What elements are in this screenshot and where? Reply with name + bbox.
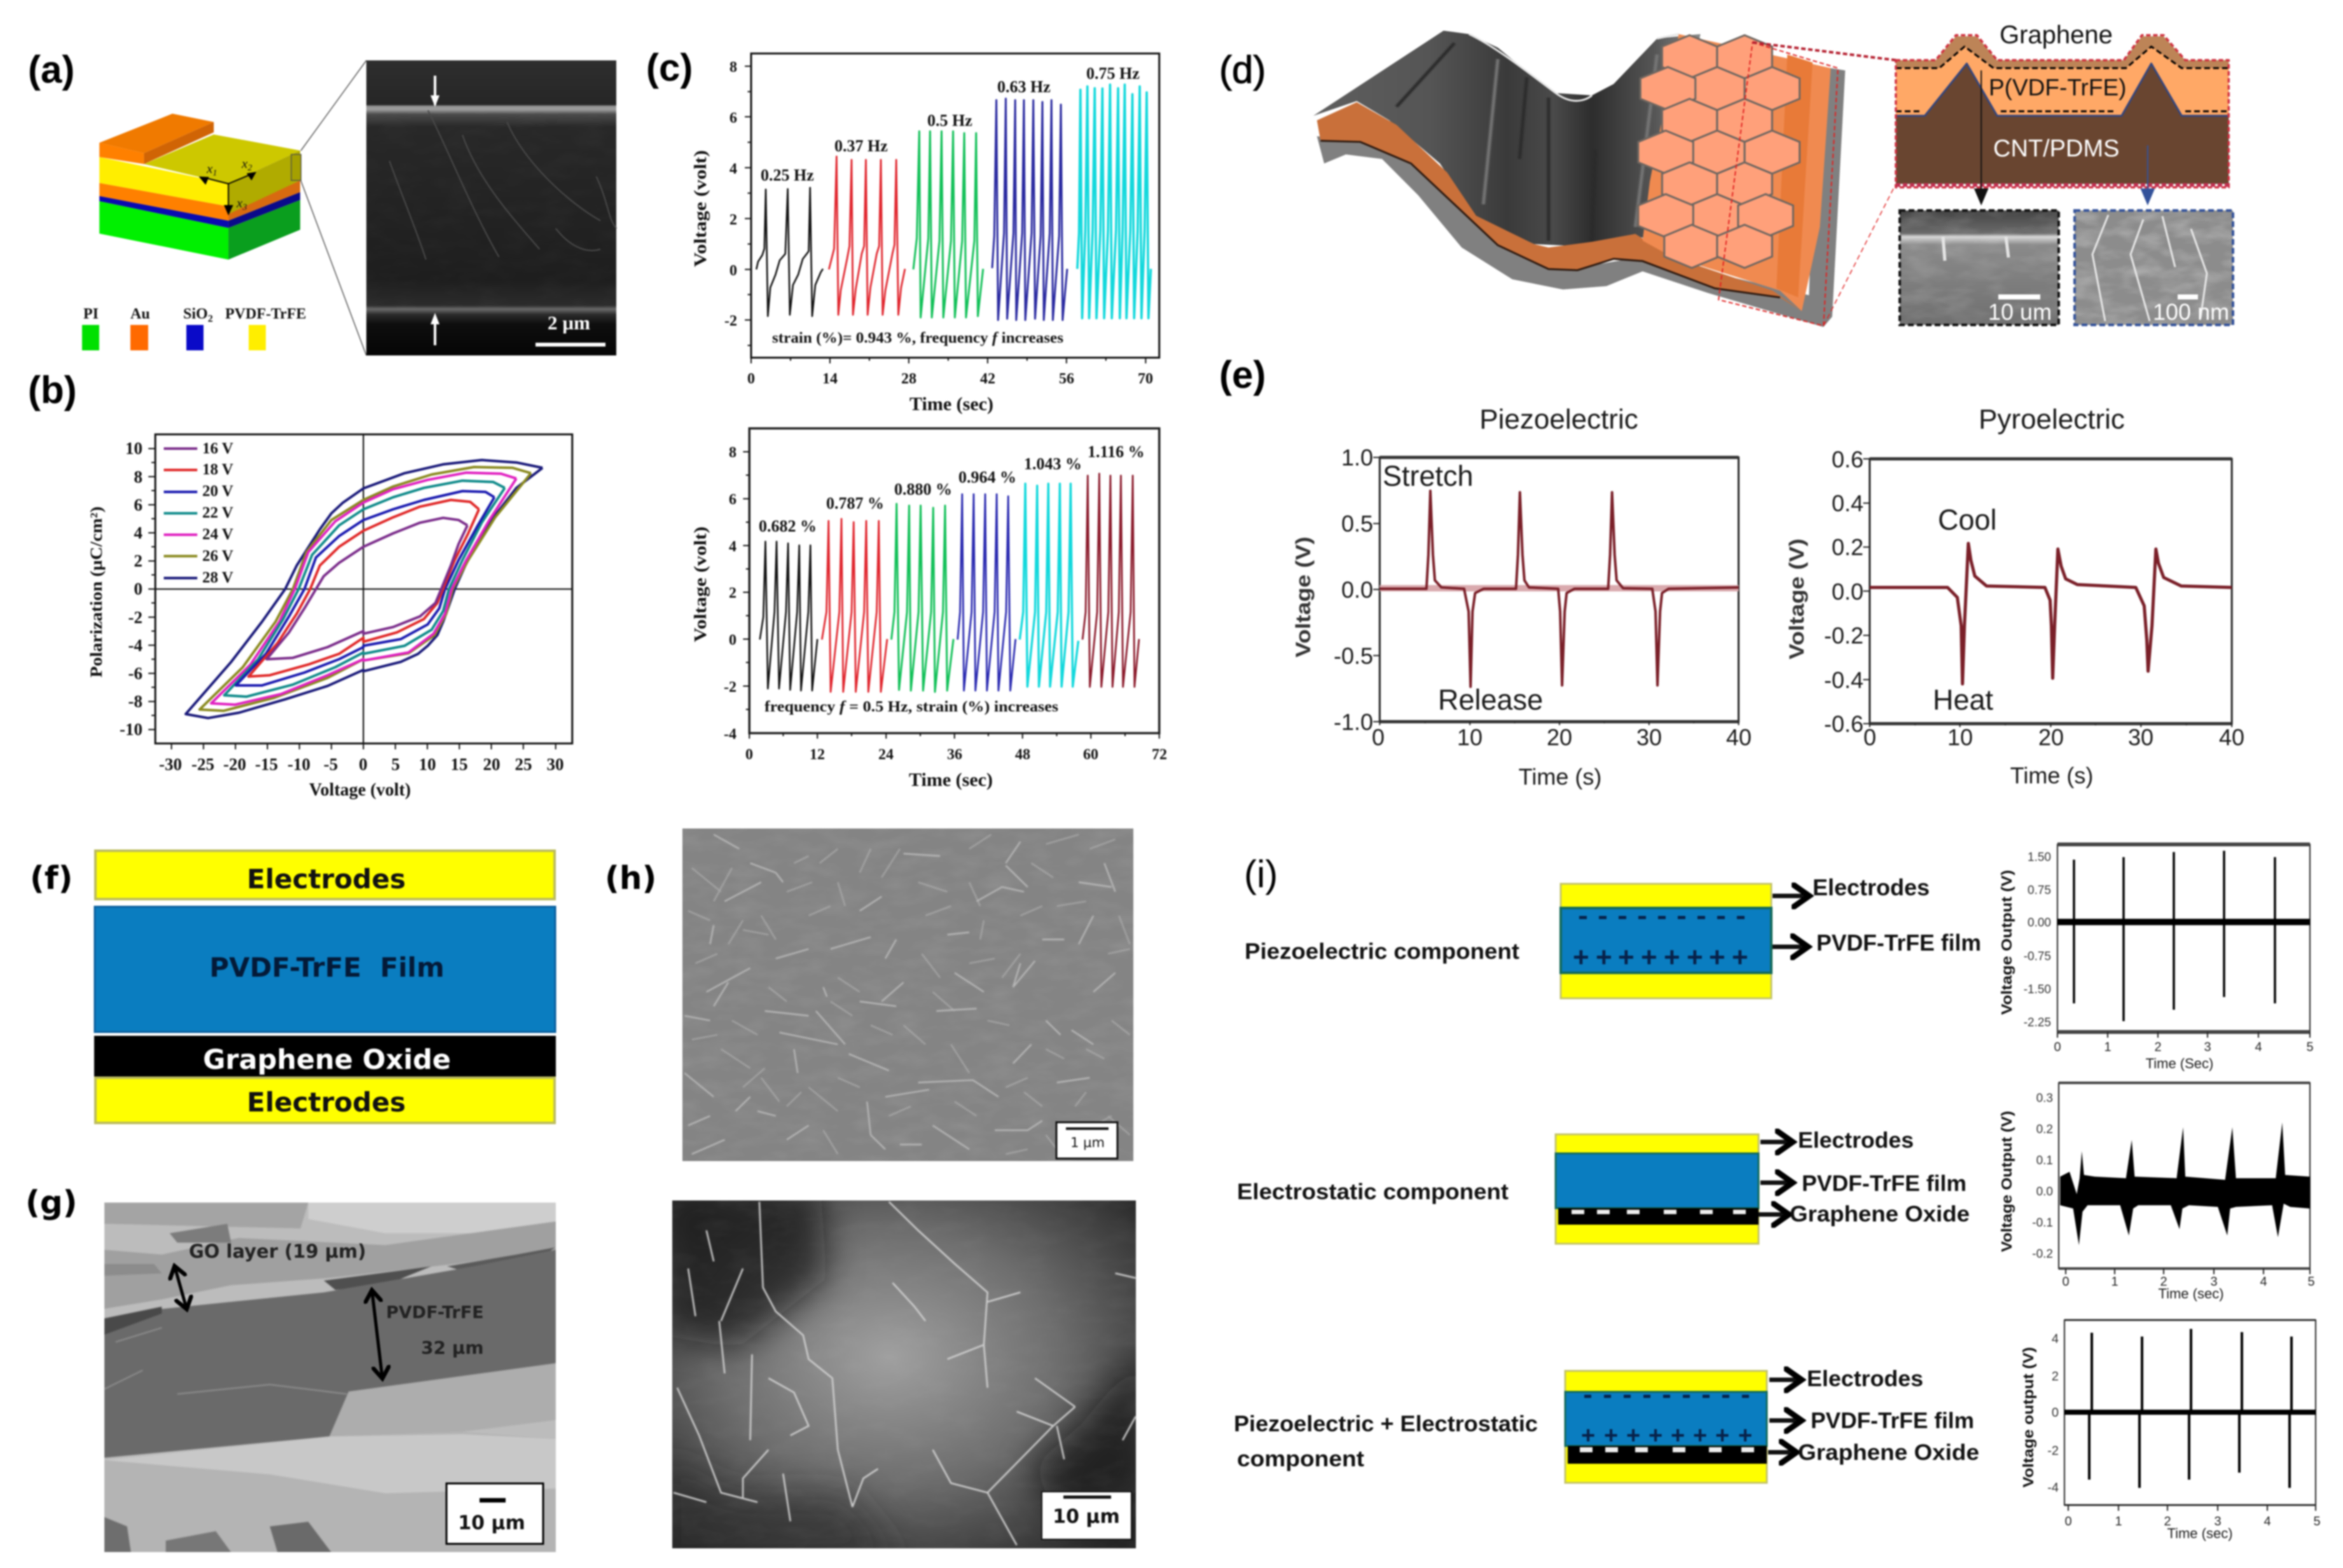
layer labels: PVDF-TrFE film xyxy=(1816,930,1981,956)
tick labels: 0 xyxy=(1372,724,1385,750)
graphene oxide layer: Graphene Oxide xyxy=(203,1044,451,1076)
output chart: Time (sec) xyxy=(2167,1525,2233,1541)
tick labels: 0.4 xyxy=(1832,490,1863,516)
output chart: 0.2 xyxy=(2036,1123,2053,1136)
output chart: -2 xyxy=(2047,1444,2059,1458)
tick labels: 1.0 xyxy=(1341,444,1373,471)
y tick labels: -4 xyxy=(724,726,736,743)
layer labels: PVDF-TrFE film xyxy=(1811,1408,1974,1433)
SEM cross-section xyxy=(366,60,616,355)
panel h: SEM images of graphene oxide xyxy=(605,829,1145,1564)
strain labels: 0.964 % xyxy=(958,468,1016,486)
legend labels: 20 V xyxy=(202,483,233,500)
y tick labels: 6 xyxy=(729,110,737,127)
cross-section labels xyxy=(1989,21,2126,162)
panel a: device schematic and SEM xyxy=(28,48,616,355)
SEM cross-section: 2 µm xyxy=(548,312,590,334)
SEM inset: 100 nm: 100 nm xyxy=(2153,299,2229,325)
y tick labels: 6 xyxy=(134,495,142,514)
hysteresis plot area xyxy=(148,434,572,750)
legend labels: 18 V xyxy=(202,461,233,478)
device stack: ++++++++ xyxy=(1573,942,1748,973)
tick labels: 40 xyxy=(2219,724,2244,750)
x tick labels: 0 xyxy=(745,746,753,763)
x tick labels: 5 xyxy=(391,755,400,774)
output chart: 1 xyxy=(2111,1275,2118,1289)
bottom electrode xyxy=(95,1078,555,1123)
panel g: SEM cross-section xyxy=(25,1184,556,1552)
frequency labels: 0.37 Hz xyxy=(834,137,888,155)
output chart: 5 xyxy=(2306,1040,2314,1054)
device stack: ++++++++ xyxy=(1581,1422,1752,1449)
plot frame and trace xyxy=(1373,457,1739,725)
axis labels xyxy=(206,156,252,212)
chart title: Pyroelectric xyxy=(1979,404,2125,435)
cross-section labels: CNT/PDMS xyxy=(1993,135,2119,162)
output chart: 3 xyxy=(2204,1040,2211,1054)
panel c top: voltage versus frequency chart xyxy=(646,46,1159,415)
panel label e: (e) xyxy=(1219,354,1266,396)
output chart: 2 xyxy=(2154,1040,2162,1054)
x tick labels: 36 xyxy=(947,746,962,763)
tick labels: 0.0 xyxy=(1341,577,1373,603)
arrows xyxy=(1768,1380,1800,1452)
legend: PI xyxy=(83,306,99,322)
panel label b: (b) xyxy=(28,369,77,411)
chart: pyroelectric xyxy=(1785,404,2244,788)
output chart: 3 xyxy=(2210,1275,2218,1289)
row title: Electrostatic component xyxy=(1237,1179,1509,1204)
legend xyxy=(82,306,307,350)
panel i: component diagrams and output charts xyxy=(1234,844,2321,1541)
panel b: polarization hysteresis chart xyxy=(28,369,572,800)
output chart xyxy=(2020,1320,2321,1541)
y tick labels: -2 xyxy=(724,679,736,696)
layer labels xyxy=(1798,1366,1979,1465)
output chart: Voltage output (V) xyxy=(2020,1347,2036,1488)
graphene oxide layer xyxy=(94,1036,556,1076)
y tick labels: 8 xyxy=(134,467,142,486)
x tick labels: 15 xyxy=(450,755,468,774)
device stack xyxy=(1561,884,1771,998)
output chart: 1 xyxy=(2115,1515,2122,1529)
axis labels: x xyxy=(207,161,212,176)
x tick labels: 30 xyxy=(547,755,563,774)
output chart xyxy=(1998,844,2314,1071)
x tick labels: -20 xyxy=(223,755,246,774)
x tick labels: 60 xyxy=(1083,746,1098,763)
layer labels: Electrodes xyxy=(1813,874,1930,900)
SEM inset: 100 nm xyxy=(2075,210,2233,325)
y tick labels: -10 xyxy=(120,720,142,739)
panel label g: (g) xyxy=(25,1184,78,1221)
panel label i: (i) xyxy=(1244,853,1278,895)
output chart: Voltage Output (V) xyxy=(1998,1111,2015,1252)
legend: 2 xyxy=(208,313,213,324)
row title: Piezoelectric + Electrostatic xyxy=(1234,1412,1538,1436)
y axis title: Voltage (volt) xyxy=(691,150,710,267)
SEM image xyxy=(104,1202,556,1552)
annotations: Release xyxy=(1438,684,1543,716)
y tick labels: 6 xyxy=(729,492,736,508)
annotations: Cool xyxy=(1938,504,1997,536)
tick labels: 40 xyxy=(1726,724,1752,750)
top electrode xyxy=(95,851,555,899)
chart title: Piezoelectric xyxy=(1479,404,1638,435)
output chart: -0.2 xyxy=(2032,1248,2053,1261)
scale bar box: 1 µm xyxy=(1070,1135,1105,1150)
row title xyxy=(1234,1412,1538,1471)
x tick labels: 56 xyxy=(1059,371,1074,387)
x tick labels: 25 xyxy=(515,755,532,774)
layered cross-section xyxy=(1896,35,2229,205)
x tick labels xyxy=(747,371,1153,387)
x tick labels: 42 xyxy=(980,371,995,387)
strain labels xyxy=(759,443,1145,535)
arrows xyxy=(1773,896,1807,947)
output chart: 5 xyxy=(2307,1275,2315,1289)
condition note: frequency f = 0.5 Hz, strain (%) increases xyxy=(764,699,1058,715)
bottom electrode: Electrodes xyxy=(247,1087,406,1118)
y tick labels: 0 xyxy=(729,263,737,279)
top electrode: Electrodes xyxy=(247,863,406,895)
output chart: -0.1 xyxy=(2032,1216,2053,1230)
axis titles: Voltage (V) xyxy=(1785,539,1808,659)
row title: Piezoelectric component xyxy=(1245,939,1519,964)
SEM annotations: 32 µm xyxy=(421,1337,483,1358)
annotations xyxy=(1383,460,1543,716)
x axis title: Time (sec) xyxy=(909,394,993,415)
SEM annotations: GO layer (19 µm) xyxy=(189,1241,366,1262)
3D wavy film xyxy=(1313,31,1896,327)
tick labels: -0.2 xyxy=(1824,622,1863,649)
panel label h: (h) xyxy=(605,860,656,897)
output chart: 2 xyxy=(2052,1370,2059,1384)
output chart: 4 xyxy=(2260,1275,2267,1289)
axis labels: 2 xyxy=(247,163,252,173)
tick labels: 0 xyxy=(1863,724,1876,750)
row: electrostatic component xyxy=(1237,1083,2315,1302)
x tick labels xyxy=(745,746,1167,763)
strain labels: 1.043 % xyxy=(1024,455,1082,473)
strain labels: 0.880 % xyxy=(894,480,952,499)
tick labels: 10 xyxy=(1457,724,1483,750)
panel e: piezoelectric and pyroelectric charts xyxy=(1219,354,2244,790)
x tick labels: 14 xyxy=(822,371,838,387)
legend labels: 24 V xyxy=(202,526,233,543)
y axis title: Polarization (µC/cm²) xyxy=(87,506,106,678)
arrow: GO layer thickness xyxy=(175,1267,186,1308)
output chart: Voltage Output (V) xyxy=(1998,870,2015,1015)
tick labels xyxy=(1824,446,2244,750)
x tick labels: -15 xyxy=(255,755,278,774)
panel label c: (c) xyxy=(646,46,693,89)
y tick labels xyxy=(724,444,736,743)
tick labels: 0.0 xyxy=(1832,579,1863,605)
x tick labels: 28 xyxy=(901,371,916,387)
x tick labels: 0 xyxy=(359,755,368,774)
tick labels: 0.5 xyxy=(1341,511,1373,537)
annotations: Stretch xyxy=(1383,460,1474,492)
y tick labels: 8 xyxy=(729,444,736,461)
scale bar box xyxy=(446,1483,543,1544)
output chart: -2.25 xyxy=(2024,1016,2051,1029)
axis labels: x xyxy=(242,156,247,171)
axis labels: 1 xyxy=(212,168,217,178)
y tick labels: 0 xyxy=(134,579,142,598)
x axis title: Voltage (volt) xyxy=(309,780,411,800)
layered block schematic xyxy=(99,114,301,259)
output chart: -4 xyxy=(2047,1481,2059,1495)
output chart: 0.00 xyxy=(2028,916,2051,930)
axis labels: 3 xyxy=(242,203,247,212)
output chart: 0 xyxy=(2064,1515,2072,1529)
cross-section labels: P(VDF-TrFE) xyxy=(1989,74,2126,100)
output chart: 4 xyxy=(2264,1515,2271,1529)
tick labels: 0.6 xyxy=(1832,446,1863,472)
condition note: strain (%)= 0.943 %, frequency f increases xyxy=(772,330,1063,347)
tick labels: -1.0 xyxy=(1334,709,1373,735)
strain labels: 0.682 % xyxy=(759,517,817,535)
legend labels: 26 V xyxy=(202,547,233,565)
output chart: 0.75 xyxy=(2028,884,2051,897)
scale bar box: 10 µm xyxy=(1053,1506,1120,1528)
lower SEM image xyxy=(661,1189,1145,1564)
panel label a: (a) xyxy=(28,48,74,91)
SEM annotations xyxy=(189,1241,484,1358)
y tick labels: 10 xyxy=(125,439,142,458)
chart: piezoelectric xyxy=(1292,404,1752,790)
y tick labels: 2 xyxy=(729,585,736,602)
output chart: 1.50 xyxy=(2028,851,2051,864)
SEM inset: 10 um: 10 um xyxy=(1988,299,2052,325)
zoom guide lines xyxy=(301,60,366,355)
tick labels: -0.5 xyxy=(1334,643,1373,669)
output chart: -0.75 xyxy=(2024,950,2051,963)
x tick labels: 70 xyxy=(1138,371,1153,387)
arrows xyxy=(1759,1142,1791,1214)
frequency labels: 0.75 Hz xyxy=(1086,64,1140,83)
annotations: Heat xyxy=(1933,684,1994,716)
tick labels: 30 xyxy=(1636,724,1662,750)
axis titles xyxy=(1292,537,1601,790)
PVDF-TrFE film xyxy=(95,907,555,1032)
tick labels: -0.6 xyxy=(1824,711,1863,737)
tick labels: 20 xyxy=(1547,724,1572,750)
frequency labels: 0.5 Hz xyxy=(927,111,972,130)
output chart: 2 xyxy=(2164,1515,2171,1529)
frequency labels xyxy=(761,64,1140,184)
legend labels xyxy=(202,440,233,586)
legend labels: 28 V xyxy=(202,569,233,586)
y tick labels: 0 xyxy=(729,632,736,649)
scale bar box xyxy=(1056,1122,1117,1159)
y tick labels: -2 xyxy=(128,608,142,627)
upper SEM image xyxy=(682,829,1133,1161)
y tick labels xyxy=(120,439,142,739)
layer labels xyxy=(1790,1128,1970,1227)
strain labels: 1.116 % xyxy=(1088,443,1145,461)
frequency traces xyxy=(745,53,1159,363)
output chart: 0 xyxy=(2062,1275,2070,1289)
frequency labels: 0.25 Hz xyxy=(761,166,814,184)
axis titles: Time (s) xyxy=(2010,762,2093,788)
output chart: 3 xyxy=(2214,1515,2222,1529)
y tick labels: -6 xyxy=(128,664,142,683)
x tick labels: 24 xyxy=(878,746,894,763)
x tick labels: -10 xyxy=(287,755,310,774)
output chart: 4 xyxy=(2255,1040,2262,1054)
PVDF-TrFE film: PVDF-TrFE Film xyxy=(209,952,445,983)
layer labels: Electrodes xyxy=(1798,1128,1914,1153)
axis titles: Voltage (V) xyxy=(1292,537,1315,657)
row title: component xyxy=(1237,1447,1364,1471)
output chart xyxy=(1998,1083,2315,1302)
plot frame and trace xyxy=(1863,459,2232,727)
output chart: 1 xyxy=(2104,1040,2111,1054)
x tick labels: -30 xyxy=(159,755,182,774)
y axis title: Voltage (volt) xyxy=(691,526,710,642)
panel d: wavy film 3D render and cross-section xyxy=(1219,21,2233,327)
x tick labels: 10 xyxy=(418,755,436,774)
layer labels: Graphene Oxide xyxy=(1790,1202,1970,1227)
legend: PVDF-TrFE xyxy=(225,306,307,322)
output chart: 5 xyxy=(2313,1515,2321,1529)
y tick labels: 4 xyxy=(729,161,737,177)
layer labels: PVDF-TrFE film xyxy=(1802,1171,1966,1196)
panel label d: (d) xyxy=(1219,48,1266,91)
tick labels: -0.4 xyxy=(1824,667,1863,693)
y tick labels: 2 xyxy=(729,212,737,228)
axis labels: x xyxy=(237,195,242,210)
legend labels: 22 V xyxy=(202,504,233,521)
y tick labels: 4 xyxy=(729,539,736,555)
y tick labels xyxy=(724,59,737,329)
arrow: PVDF-TrFE thickness xyxy=(372,1291,382,1377)
tick labels: 10 xyxy=(1947,724,1973,750)
panel c bottom: voltage versus strain chart xyxy=(691,429,1167,790)
strain traces xyxy=(743,429,1159,739)
x tick labels: 0 xyxy=(747,371,755,387)
panel f: layer stack diagram xyxy=(30,851,556,1123)
x tick labels: 72 xyxy=(1152,746,1167,763)
x tick labels: -5 xyxy=(324,755,338,774)
SEM annotations: PVDF-TrFE xyxy=(386,1303,484,1323)
SEM inset: 10 um xyxy=(1900,210,2059,325)
output chart: Time (Sec) xyxy=(2146,1056,2213,1071)
cross-section labels: Graphene xyxy=(2000,21,2113,49)
output chart: 2 xyxy=(2160,1275,2167,1289)
device stack xyxy=(1565,1371,1767,1483)
x tick labels xyxy=(159,755,563,774)
y tick labels: -4 xyxy=(128,636,142,655)
output chart: 4 xyxy=(2052,1332,2059,1346)
row: piezoelectric component xyxy=(1245,844,2314,1071)
x tick labels: -25 xyxy=(191,755,214,774)
panel label f: (f) xyxy=(30,860,73,897)
legend: Au xyxy=(130,306,150,322)
scale bar box: 10 µm xyxy=(458,1512,525,1534)
y tick labels: -8 xyxy=(128,692,142,711)
x tick labels: 48 xyxy=(1015,746,1030,763)
y tick labels: 2 xyxy=(134,551,142,570)
y tick labels: 8 xyxy=(729,59,737,76)
legend: SiO xyxy=(183,306,208,322)
x tick labels: 12 xyxy=(810,746,825,763)
layer labels: Electrodes xyxy=(1807,1366,1923,1391)
legend labels: 16 V xyxy=(202,440,233,457)
strain labels: 0.787 % xyxy=(826,494,884,512)
y tick labels: 4 xyxy=(134,523,142,542)
x axis title: Time (sec) xyxy=(909,769,993,790)
tick labels: 30 xyxy=(2128,724,2153,750)
device stack xyxy=(1556,1134,1759,1244)
row: piezoelectric plus electrostatic component xyxy=(1234,1320,2321,1541)
output chart: 0.3 xyxy=(2036,1092,2053,1105)
output chart: 0.0 xyxy=(2036,1185,2053,1199)
output chart: -1.50 xyxy=(2024,983,2051,996)
layer labels: Graphene Oxide xyxy=(1798,1440,1979,1465)
tick labels: 0.2 xyxy=(1832,534,1863,560)
output chart: 0 xyxy=(2052,1406,2059,1420)
output chart: 0.1 xyxy=(2036,1154,2053,1167)
tick labels: 20 xyxy=(2038,724,2064,750)
frequency labels: 0.63 Hz xyxy=(997,78,1051,96)
scale bar box xyxy=(1042,1492,1131,1539)
annotations xyxy=(1933,504,1997,716)
axis titles xyxy=(1785,539,2093,788)
y tick labels: -2 xyxy=(724,313,737,329)
layer labels xyxy=(1813,874,1981,956)
axis titles: Time (s) xyxy=(1519,764,1601,790)
x tick labels: 20 xyxy=(483,755,500,774)
output chart: 0 xyxy=(2054,1040,2061,1054)
output chart: Time (sec) xyxy=(2158,1286,2224,1302)
tick labels xyxy=(1334,444,1752,750)
